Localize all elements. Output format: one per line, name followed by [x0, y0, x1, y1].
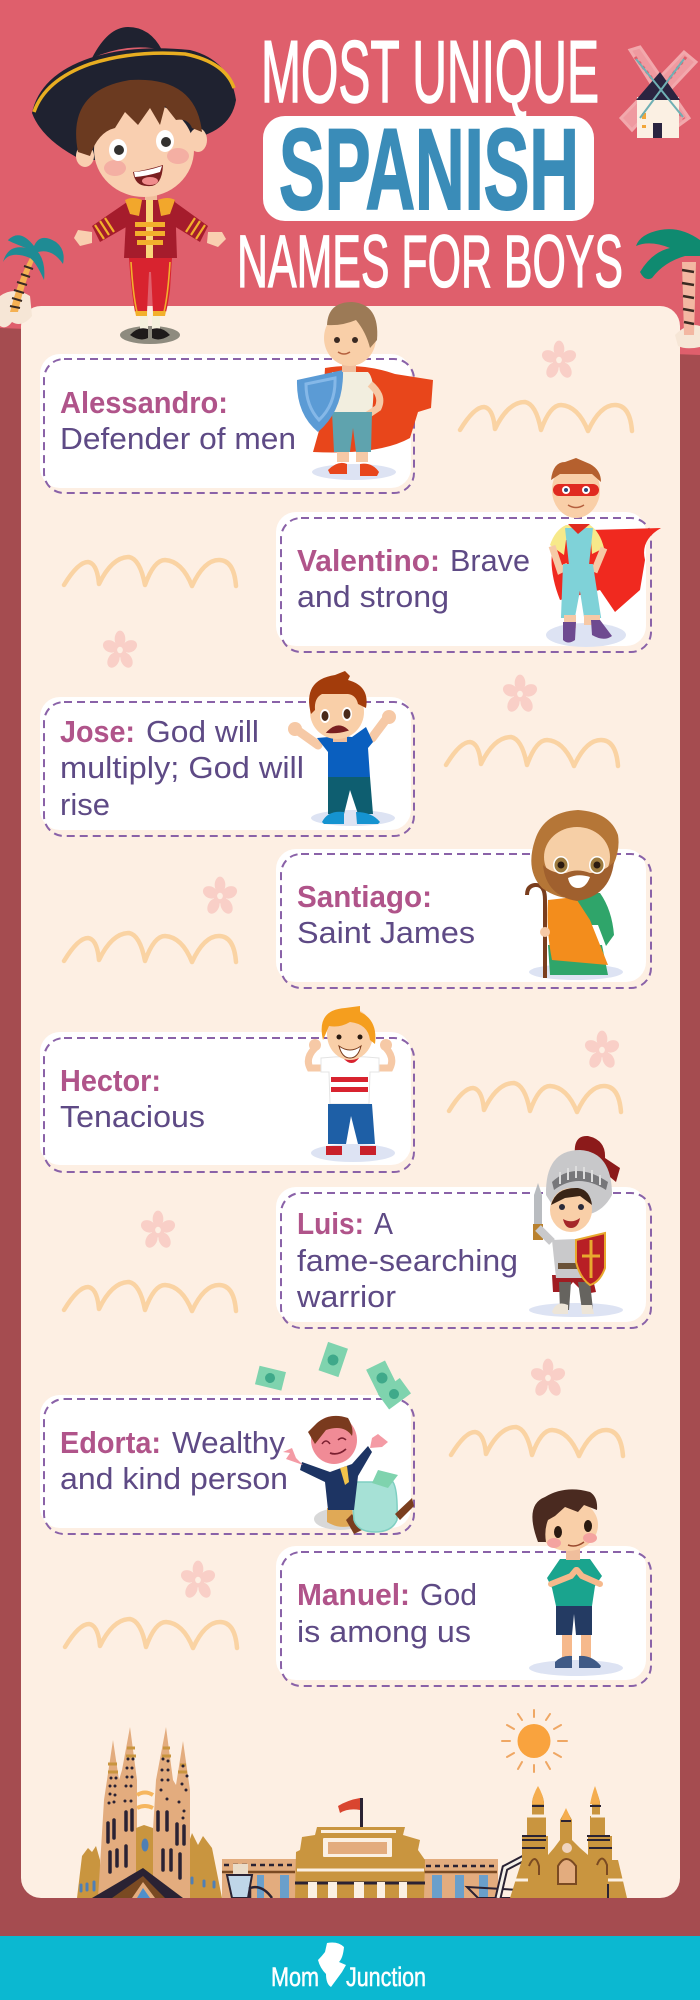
illustration: Spanish landmarks skyline — [77, 1727, 627, 1898]
text: Hector: Hector: — [60, 1063, 161, 1098]
text: Hector — [60, 1063, 205, 1134]
text: Hector: Tenacious — [60, 1099, 205, 1134]
text: Jose — [60, 714, 304, 822]
squiggle decorations — [64, 402, 632, 1648]
palm tree right — [636, 229, 700, 348]
text: Edorta: Wealthy — [172, 1425, 286, 1460]
left cathedral — [77, 1727, 222, 1898]
text: Santiago: Santiago: — [297, 879, 432, 914]
text: Valentino: Valentino: — [297, 543, 440, 578]
character: boy flexing arms — [308, 1006, 395, 1162]
matador boy — [32, 27, 236, 344]
text: Jose: God will — [146, 714, 259, 749]
text: Luis: fame-searching — [297, 1243, 518, 1278]
character: superhero with shield — [297, 302, 433, 480]
windmill — [621, 47, 696, 138]
drinking glass with straw — [467, 1857, 526, 1898]
logo: MomJunction — [271, 1942, 426, 1992]
title highlight box — [263, 116, 594, 221]
text: Jose: rise — [60, 787, 110, 822]
text: Manuel: God — [420, 1577, 477, 1612]
logo: MomJunction: Mom — [271, 1962, 319, 1992]
text: Santiago — [297, 879, 475, 950]
character: knight with sword and shield — [529, 1136, 623, 1317]
character: happy man with money jar — [283, 1416, 414, 1534]
palm tree left — [0, 235, 64, 327]
text: Santiago: Saint James — [297, 915, 475, 950]
card: Luis — [276, 1136, 651, 1328]
text: Valentino: and strong — [297, 579, 449, 614]
card: Alessandro — [40, 302, 433, 493]
card: Manuel — [276, 1489, 651, 1686]
text: Edorta: and kind person — [60, 1461, 288, 1496]
text: Luis: A — [374, 1206, 393, 1241]
footer band — [0, 1936, 700, 2000]
text: Jose: Jose: — [60, 714, 135, 749]
character: boy in overalls and red cape — [546, 458, 661, 647]
title — [237, 22, 623, 303]
text: Jose: multiply; God will — [60, 750, 304, 785]
card: Edorta — [40, 1340, 414, 1534]
header pink band — [0, 0, 700, 355]
card: Jose — [40, 671, 414, 836]
text: Valentino — [297, 543, 530, 614]
middle palace — [222, 1798, 498, 1898]
icon: flying money — [253, 1340, 412, 1411]
flower decorations — [101, 341, 621, 1600]
text: Edorta — [60, 1425, 288, 1496]
text: Luis — [296, 1206, 518, 1314]
card: Santiago — [276, 810, 651, 988]
character: saint with staff — [527, 810, 623, 980]
logo figure — [318, 1942, 346, 1987]
text: Alessandro — [60, 385, 296, 456]
logo: MomJunction: Junction — [346, 1962, 426, 1992]
text: Luis: warrior — [296, 1279, 396, 1314]
text: Alessandro: Defender of men — [60, 421, 296, 456]
text: Manuel — [297, 1577, 477, 1649]
text: Edorta: Edorta: — [60, 1425, 161, 1460]
text: Luis: Luis: — [297, 1206, 364, 1241]
text: Valentino: Brave — [450, 543, 530, 578]
character: praying boy — [529, 1489, 623, 1676]
right cathedral — [510, 1786, 627, 1898]
icon: sun — [502, 1710, 567, 1772]
main cream panel — [21, 306, 680, 1898]
text: Alessandro: Alessandro: — [60, 385, 228, 420]
text: Manuel: is among us — [297, 1614, 471, 1649]
card: Valentino — [276, 458, 661, 652]
text: Manuel: Manuel: — [297, 1577, 410, 1612]
jug — [227, 1864, 272, 1898]
card: Hector — [40, 1006, 414, 1172]
character: surprised boy in blue shirt — [288, 671, 396, 826]
